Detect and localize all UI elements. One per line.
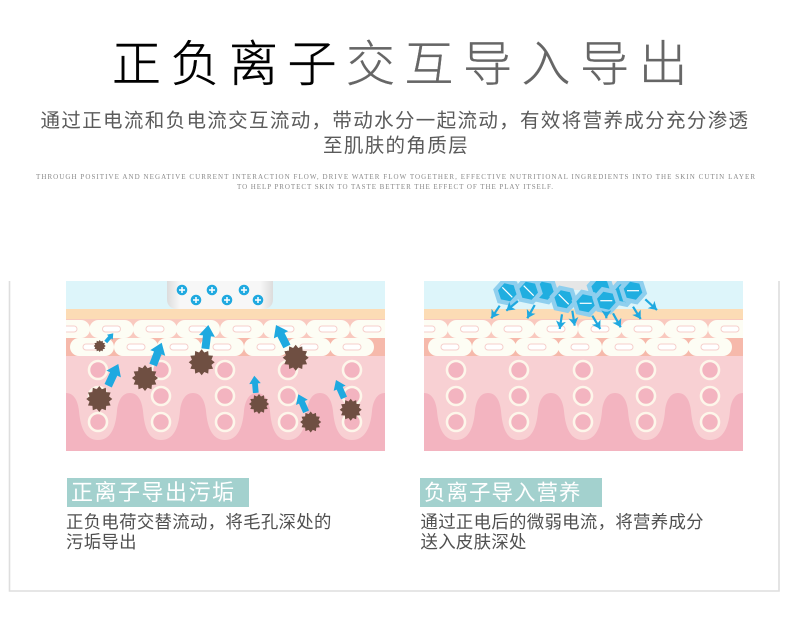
downward arrows: [491, 299, 657, 329]
right caption text: [420, 512, 704, 552]
subtitle text: [40, 110, 749, 157]
right caption text: 通过正电后的微弱电流，将营养成分: [420, 512, 704, 532]
panel frame: [10, 281, 779, 591]
left caption text: 污垢导出: [66, 532, 137, 552]
title: [112, 38, 697, 92]
diagram: positive ions extracting dirt: [46, 281, 437, 451]
nutrient hexagons: [493, 281, 648, 318]
subtitle text: 至肌肤的角质层: [323, 135, 469, 157]
english description: [36, 173, 755, 191]
english description: THROUGH POSITIVE AND NEGATIVE CURRENT INTERACTION FLOW, DRIVE WATER FLOW TOGETHER, EFFECTIVE NUTRITIONAL INGREDIENTS INTO THE SKIN CUTIN LAYER: [36, 173, 755, 181]
upward arrows: [101, 321, 350, 414]
diagram: negative ions delivering nutrients: [424, 281, 743, 451]
title: 交互导入导出: [346, 38, 697, 92]
left caption text: [66, 512, 332, 552]
left caption heading: 正离子导出污垢: [71, 480, 236, 505]
english description: TO HELP PROTECT SKIN TO TASTE BETTER THE EFFECT OF THE PLAY ITSELF.: [237, 183, 553, 191]
dirt particles: [86, 340, 362, 432]
left caption text: 正负电荷交替流动，将毛孔深处的: [66, 512, 332, 532]
subtitle text: 通过正电流和负电流交互流动，带动水分一起流动，有效将营养成分充分渗透: [40, 110, 749, 132]
right caption heading: 负离子导入营养: [424, 481, 582, 505]
right caption text: 送入皮肤深处: [420, 532, 527, 552]
icon: device with positive charges: [167, 281, 273, 309]
title: 正负离子: [112, 38, 346, 92]
